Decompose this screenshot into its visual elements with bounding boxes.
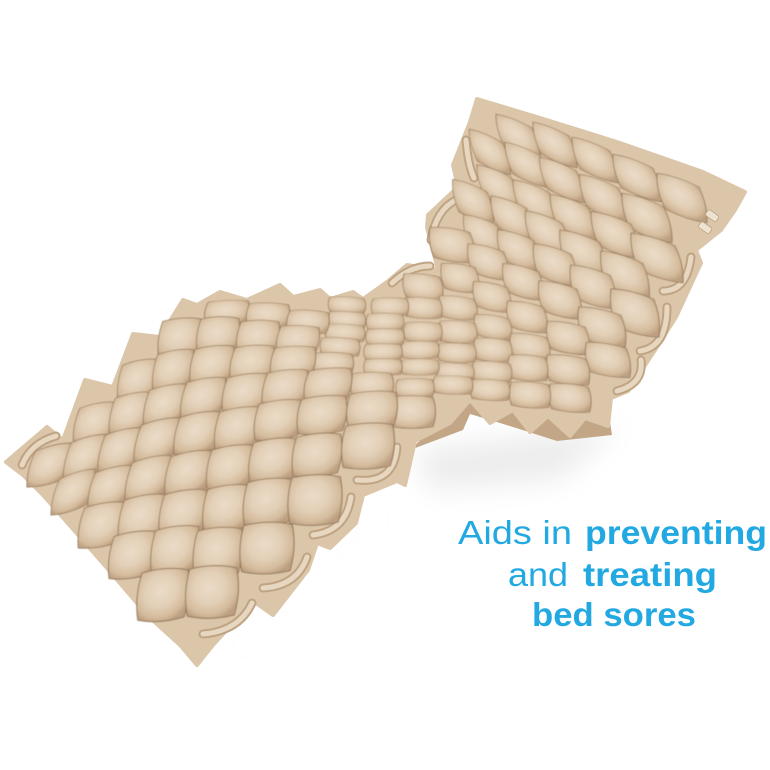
caption line 2: and — [508, 556, 568, 593]
caption line 1: preventing — [585, 514, 767, 551]
underside of mattress at waist — [410, 390, 612, 450]
air cells: head section — [388, 111, 710, 428]
air valves — [698, 209, 719, 234]
caption line 1: Aids in — [458, 514, 572, 551]
caption line 2: treating — [583, 556, 717, 593]
air cells: foot section — [24, 300, 399, 623]
cast shadow under mattress — [225, 425, 620, 665]
caption: aids in preventing and treating bed sores — [458, 514, 767, 633]
air cells: waist section — [312, 296, 409, 398]
mattress base sheet — [6, 99, 745, 665]
caption line 3: bed sores — [532, 596, 696, 633]
mattress — [6, 99, 745, 665]
raised edge tubes — [22, 140, 691, 634]
